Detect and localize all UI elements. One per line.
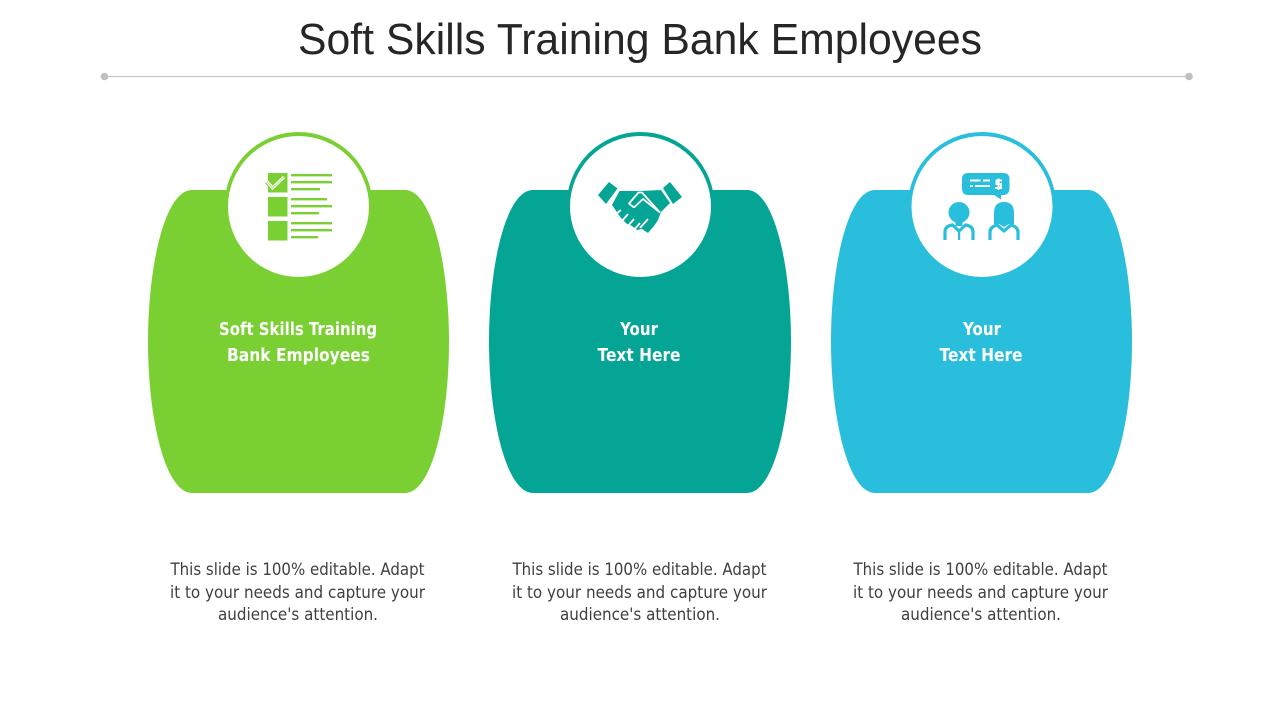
card heading: Text Here — [598, 345, 680, 366]
card shape green — [148, 190, 449, 493]
card shape teal — [489, 190, 791, 493]
circle badge blue — [908, 132, 1056, 280]
circle badge green — [224, 132, 372, 280]
card heading: Your — [619, 319, 658, 340]
panel: conversation — [831, 132, 1132, 493]
description 3: it to your needs and capture your — [853, 583, 1108, 603]
description 1: This slide is 100% editable. Adapt — [170, 560, 425, 580]
circle badge teal — [566, 132, 714, 280]
icon: handshake — [598, 182, 682, 233]
description 2: it to your needs and capture your — [512, 583, 767, 603]
icon: checklist — [267, 173, 332, 240]
card heading: Text Here — [940, 345, 1022, 366]
title: Soft Skills Training Bank Employees — [298, 15, 982, 64]
card shape blue — [831, 190, 1132, 493]
card heading: Soft Skills Training — [219, 319, 377, 340]
description 2: audience's attention. — [560, 605, 720, 625]
icon: two people talking — [945, 173, 1018, 240]
description 1: audience's attention. — [218, 605, 378, 625]
title divider — [101, 73, 1193, 80]
panel: handshake — [489, 132, 791, 493]
description 3: audience's attention. — [901, 605, 1061, 625]
description 3: This slide is 100% editable. Adapt — [853, 560, 1108, 580]
description 2: This slide is 100% editable. Adapt — [512, 560, 767, 580]
description 1: it to your needs and capture your — [170, 583, 425, 603]
card heading: Your — [962, 319, 1001, 340]
panel: soft skills training — [148, 132, 449, 493]
card heading: Bank Employees — [227, 345, 370, 366]
